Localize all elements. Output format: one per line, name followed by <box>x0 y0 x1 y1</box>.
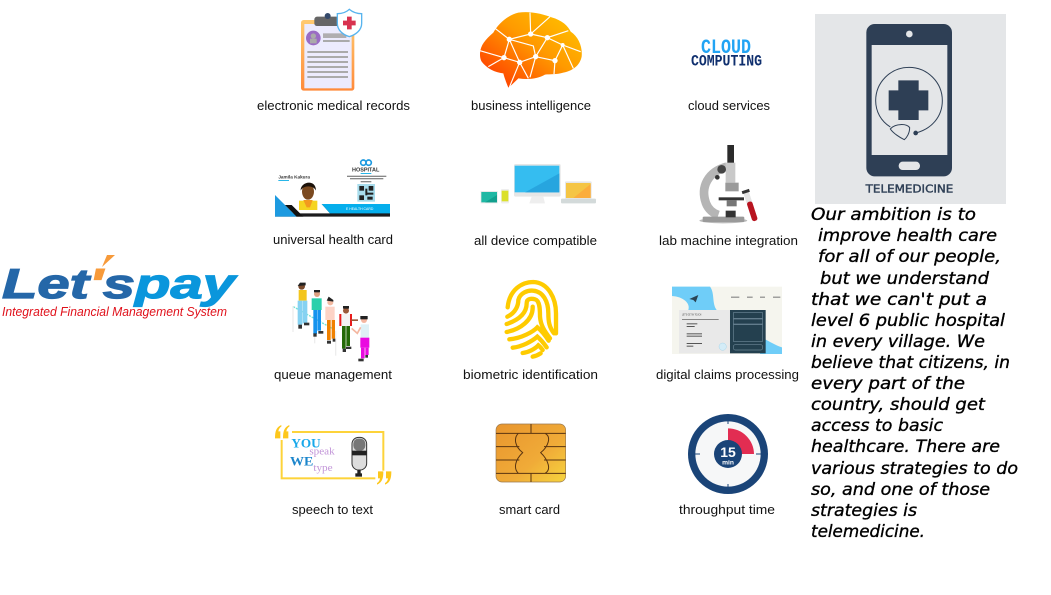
icon: fingerprint <box>507 282 556 357</box>
icon: cloud computing wordmark <box>691 37 762 70</box>
label: smart card <box>499 502 560 517</box>
label: business intelligence <box>471 98 591 113</box>
logo wordmark: Let 'spay <box>2 260 239 307</box>
label: lab machine integration <box>659 233 798 248</box>
text block: telemedicine ambition: believe that citizens, in <box>811 353 1010 373</box>
text block: telemedicine ambition: telemedicine. <box>811 522 925 542</box>
panel: telemedicine image <box>815 14 1006 204</box>
person 3 <box>325 297 335 344</box>
text block: telemedicine ambition <box>811 205 1018 542</box>
label: electronic medical records <box>257 98 410 113</box>
text block: telemedicine ambition: access to basic <box>811 416 944 436</box>
logo: Let's Pay <box>2 255 239 319</box>
text block: telemedicine ambition: improve health care <box>818 226 997 246</box>
item: universal health card <box>273 160 393 247</box>
text block: telemedicine ambition: but we understand <box>820 269 989 289</box>
item: business intelligence <box>471 12 591 113</box>
item: electronic medical records <box>257 9 410 113</box>
text block: telemedicine ambition: strategies is <box>811 501 917 521</box>
label: speech to text <box>292 502 373 517</box>
icon: claims web screen <box>672 287 782 354</box>
icon: brain <box>480 12 582 88</box>
text block: telemedicine ambition: that we can't put a <box>811 290 987 310</box>
item: digital claims processing <box>656 287 799 382</box>
label: digital claims processing <box>656 367 799 382</box>
icon: phone <box>866 24 952 176</box>
icon: microscope <box>699 145 759 223</box>
icon: health card: Jamila Kakura <box>278 175 310 180</box>
text block: telemedicine ambition: healthcare. There are <box>811 437 1000 457</box>
item: smart card <box>496 424 566 517</box>
logo tagline: Integrated Financial Management System <box>2 305 227 319</box>
text block: telemedicine ambition: in every village. We <box>811 332 985 352</box>
text block: telemedicine ambition: so, and one of those <box>811 480 990 500</box>
label: cloud services <box>688 98 770 113</box>
icon: you speak we type: WE <box>290 454 313 468</box>
icon: 15 minute timer <box>688 414 768 494</box>
text block: telemedicine ambition: country, should get <box>811 395 986 415</box>
icon: people queue <box>292 283 369 361</box>
person 2 <box>312 290 323 337</box>
text: TELEMEDICINE: TELEMEDICINE <box>865 184 953 196</box>
item: lab machine integration <box>659 145 798 248</box>
person 5 <box>352 316 369 361</box>
icon: health card: E HEALTH CARD <box>346 207 374 211</box>
text block: telemedicine ambition: every part of the <box>811 374 965 394</box>
icon: you speak we type: speak <box>309 446 335 457</box>
label: queue management <box>274 367 392 382</box>
icon: health card: HOSPITAL <box>352 167 380 173</box>
item: queue management <box>274 283 392 382</box>
icon: devices <box>481 164 596 203</box>
label: biometric identification <box>463 367 598 382</box>
text block: telemedicine ambition: Our ambition is to <box>811 205 976 225</box>
icon: claims web screen: LET'S GET IN TOUCH <box>682 313 701 317</box>
icon: card chip <box>496 424 566 482</box>
icon: cloud computing wordmark: CLOUD <box>701 37 751 60</box>
icon: health card <box>275 160 390 217</box>
person 1 <box>298 283 309 329</box>
label: all device compatible <box>474 233 597 248</box>
icon: you speak we type: YOU <box>291 437 321 451</box>
icon: 15 minute timer: 15 <box>720 444 736 460</box>
label: throughput time <box>679 502 775 517</box>
item: throughput time <box>679 414 775 517</box>
item: all device compatible <box>474 164 597 248</box>
person 4 <box>339 306 358 352</box>
item: cloud services <box>688 37 770 113</box>
text block: telemedicine ambition: level 6 public hospital <box>811 311 1005 331</box>
icon: you speak we type: type <box>313 463 333 474</box>
item: biometric identification <box>463 282 598 382</box>
icon: cloud computing wordmark: COMPUTING <box>691 52 762 70</box>
text block: telemedicine ambition: various strategies to do <box>811 459 1018 479</box>
icon: 15 minute timer: min <box>722 459 734 466</box>
text block: telemedicine ambition: for all of our people, <box>818 247 1001 267</box>
label: universal health card <box>273 232 393 247</box>
icon: you speak we type <box>273 423 393 486</box>
item: speech to text <box>273 423 393 517</box>
logo orange accent <box>102 255 115 267</box>
icon: medical clipboard <box>301 9 362 91</box>
